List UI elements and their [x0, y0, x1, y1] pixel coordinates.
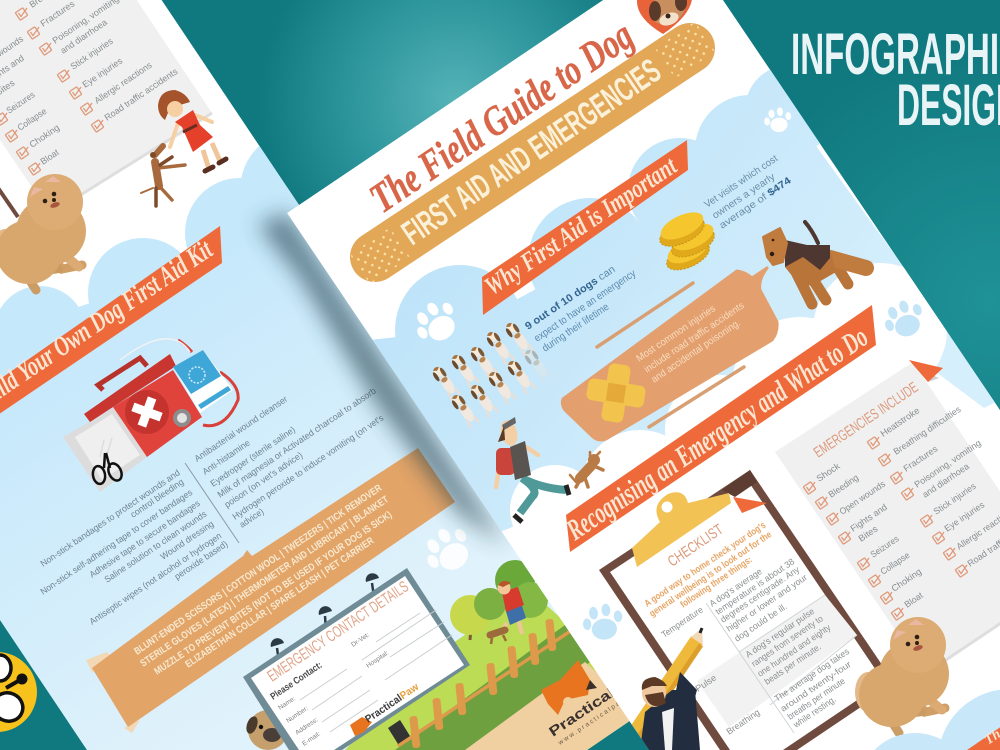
list text: Choking	[28, 122, 61, 150]
ribbon text: ELIZABETHAN COLLAR | SPARE LEASH | PET CARRIER	[184, 535, 377, 670]
text: 9 out of 10 dogs: expect to have an emergency	[532, 267, 639, 344]
icon: hiker	[496, 417, 569, 522]
bubble text: include road traffic accidents	[643, 300, 747, 375]
text block: medication supplies: Eyedropper (sterile saline)	[209, 424, 297, 489]
list text: Eye injuries	[943, 499, 987, 534]
table: breathing row	[725, 646, 853, 737]
banner: Build Your Own Dog First Aid Kit	[0, 226, 222, 427]
text block: bandage supplies: Adhesive tape to secure bandages	[88, 498, 202, 580]
table: pulse row: ranges from seventy to	[750, 613, 825, 669]
table: pulse row	[694, 606, 833, 694]
sign form fields: PracticalPaw	[363, 680, 422, 725]
list text: Bloat	[903, 590, 925, 610]
sign form fields: Number:	[285, 705, 310, 725]
text block: bandage supplies: Saline solution to clean wounds	[103, 508, 209, 585]
sign form fields: E-mail:	[301, 730, 322, 748]
table: temperature row: degrees centigrade. Any	[719, 564, 802, 625]
list text: and diarrhoea	[59, 17, 109, 56]
list text: Shock	[815, 461, 842, 484]
list text: Eye injuries	[81, 55, 125, 90]
icon: man with pencil	[633, 628, 703, 750]
text block: bandage supplies: peroxide based)	[173, 539, 230, 582]
text: 9 out of 10 dogs: during their lifetime	[540, 301, 611, 354]
list text: Stick injuries	[69, 36, 115, 72]
text block: bandage supplies: Wound dressing	[159, 519, 216, 562]
corner fold	[909, 360, 943, 382]
heading: EMERGENCIES INCLUDE	[811, 379, 921, 461]
icon: small dog	[570, 452, 603, 487]
icon: bandage cross	[583, 360, 649, 426]
clipboard edge fragment	[0, 188, 18, 217]
text: 9 out of 10 dogs	[525, 267, 636, 352]
panel: emergencies list on left sheet	[0, 0, 212, 214]
icon: paw top right	[764, 107, 792, 132]
text block: medication supplies: poison (on vet's advice)	[223, 450, 304, 510]
table: temperature row: higher or lower and your	[725, 572, 809, 634]
text: vet cost: Vet visits which cost	[703, 153, 780, 210]
list text: Collapse	[16, 106, 48, 133]
text block: medication supplies: advice)	[238, 506, 266, 530]
list text: Seizures	[5, 89, 37, 116]
list text	[815, 404, 1000, 610]
table: temperature row: Temperature	[660, 605, 705, 640]
list text: Poisoning, vomiting	[913, 438, 983, 490]
text block: bandage supplies: Antiseptic wipes (not alcohol or hydrogen	[88, 531, 223, 627]
clipboard clip	[632, 492, 731, 567]
table: pulse row: beats per minute.	[763, 641, 823, 687]
text: vet cost	[703, 153, 794, 231]
landscape: grass	[345, 606, 604, 750]
panel: left infographic sheet	[0, 0, 650, 750]
streaks and speech bubble	[562, 268, 777, 440]
sign form fields	[269, 610, 452, 748]
banner: Why First Aid is Important	[479, 140, 688, 315]
checklist intro: general wellbeing is to look out for the	[648, 529, 774, 619]
table: pulse row: Pulse	[694, 673, 718, 694]
bottom cloud	[874, 689, 1000, 750]
text block: medication supplies: Anti-histamine	[201, 438, 252, 477]
icon: paw white left sheet	[427, 528, 468, 570]
checkboxes	[803, 437, 968, 620]
icon: coins	[659, 212, 715, 270]
list text: Stick injuries	[932, 481, 978, 517]
text block: bandage supplies	[39, 468, 230, 627]
icon: paw light blue right	[879, 295, 929, 343]
panel: emergency contact sign	[243, 568, 470, 750]
banner: Recognising an Emergency and What to Do	[560, 305, 876, 552]
ribbon: equipment list	[86, 448, 455, 733]
panel: main infographic sheet	[287, 0, 1000, 750]
list text: Road traffic accidents	[103, 66, 180, 123]
ribbon text: STERILE GLOVES (LATEX) | THERMOMETER AND LUBRICANT | BLANKET	[139, 494, 391, 669]
icon: paw	[417, 302, 455, 340]
checklist intro: following three things:	[679, 554, 754, 610]
text block: medication supplies	[193, 386, 386, 530]
text: 9 out of 10 dogs: 9 out of 10 dogs can	[523, 263, 618, 332]
list text: Bites	[857, 523, 880, 544]
sign form fields: Dr-Vet:	[350, 631, 371, 649]
panel: clipboard checklist	[599, 470, 895, 750]
ribbon text: BLUNT-ENDED SCISSORS | COTTON WOOL | TWEEZERS | TICK REMOVER	[133, 482, 385, 657]
list text	[0, 0, 180, 167]
list text: Choking	[890, 566, 923, 594]
landscape: fence	[398, 619, 575, 748]
table: temperature row: dog could be ill.	[733, 601, 789, 644]
icon: first aid kit	[63, 339, 238, 492]
table: pulse row: one hundred and eighty	[756, 622, 833, 679]
icon: pomeranian	[855, 617, 949, 733]
bubble text: and accidental poisoning.	[650, 318, 743, 385]
icon: boy with dog	[490, 581, 526, 644]
list text: Breathing difficulties	[892, 404, 963, 457]
table: breathing row: The average dog takes	[773, 646, 851, 704]
list text: Open wounds	[838, 478, 887, 517]
panel: emergencies include	[775, 360, 1000, 700]
list text: Allergic reactions	[93, 60, 154, 106]
icon: terrier dog	[763, 222, 866, 304]
text block: bandage supplies: Non-stick self-adhering tape to cover bandages	[39, 487, 195, 597]
list text: Fights and	[849, 502, 889, 534]
text block: bandage supplies: control bleeding	[129, 477, 186, 520]
icon: pomeranian left	[0, 174, 86, 290]
pictogram: 9 out of 10 dogs	[430, 320, 552, 429]
text block: bandage supplies: Non-stick bandages to protect wounds and	[39, 468, 182, 569]
checkbox column	[0, 8, 104, 175]
text: vet cost: average of $474	[718, 175, 794, 231]
logo badge	[0, 652, 37, 732]
icon: dog in heart	[637, 0, 692, 34]
table: temperature row	[660, 556, 809, 644]
text block: medication supplies: Hydrogen peroxide to induce vomiting (on vet's	[231, 412, 386, 522]
table: temperature row: temperature is about 38	[714, 556, 796, 617]
sky clouds on left sheet	[0, 130, 640, 750]
table: breathing row: while resting.	[791, 694, 838, 730]
clipboard corner fold	[722, 470, 767, 513]
list text: Bleeding	[827, 472, 860, 500]
shadow of main sheet	[258, 213, 505, 545]
list text: Bloat	[39, 147, 61, 167]
sky clouds	[370, 65, 1000, 620]
landscape: hedge	[395, 625, 600, 750]
table: temperature row: A dog's average	[708, 566, 764, 609]
table row highlight	[697, 595, 857, 727]
icon: girl	[158, 90, 226, 171]
sign form fields: Name:	[277, 695, 297, 712]
footer: wood	[465, 662, 645, 750]
icon: pug	[246, 710, 284, 750]
table: breathing row: Breathing	[725, 707, 762, 737]
next section banner	[967, 724, 1000, 750]
banner: Why First Aid is Important: Why First Aid is Important	[479, 151, 682, 301]
table: breathing row: breaths per minute	[786, 676, 847, 722]
text block: medication supplies: Milk of magnesia or Activated charcoal to absorb	[216, 386, 378, 500]
table: breathing row: around twenty-four	[779, 659, 853, 714]
heading: Infographic Design	[791, 22, 1000, 138]
bubble text: Most common injuries	[635, 303, 718, 364]
sign heading: EMERGENCY CONTACT DETAILS	[265, 578, 412, 685]
list text: and diarrhoea	[921, 461, 971, 500]
ribbon text: MUZZLE TO PREVENT BITES (NOT TO BE USED IF YOUR DOG IS SICK)	[153, 510, 394, 677]
list text: Fractures	[902, 443, 940, 474]
logo: PracticalPaw footer	[541, 660, 619, 744]
sign form fields: Hospital:	[365, 650, 390, 670]
list text: Heatstroke	[879, 405, 921, 439]
sign form fields: Address:	[294, 716, 320, 737]
checklist intro: A good way to home check your dog's	[643, 520, 768, 609]
bandage banner	[350, 22, 715, 284]
text: vet cost: owners a yearly	[711, 172, 777, 221]
landscape: trees	[450, 560, 548, 640]
icon: paw light blue left	[581, 602, 624, 641]
icon: small dog jumping	[141, 146, 185, 206]
list text: Seizures	[869, 533, 901, 560]
text block: medication supplies: Antibacterial wound cleanser	[193, 394, 289, 464]
logo: PracticalPaw footer: Practical Paw	[546, 664, 648, 739]
sign form fields: Please Contact:	[269, 660, 324, 702]
white lower clouds	[500, 263, 1000, 750]
checklist heading: CHECKLIST	[665, 521, 726, 570]
logo: PracticalPaw footer: www.practicalpaw.com	[556, 685, 644, 747]
list text: Collapse	[879, 550, 911, 577]
table: pulse row: A dog's regular pulse	[744, 606, 816, 660]
